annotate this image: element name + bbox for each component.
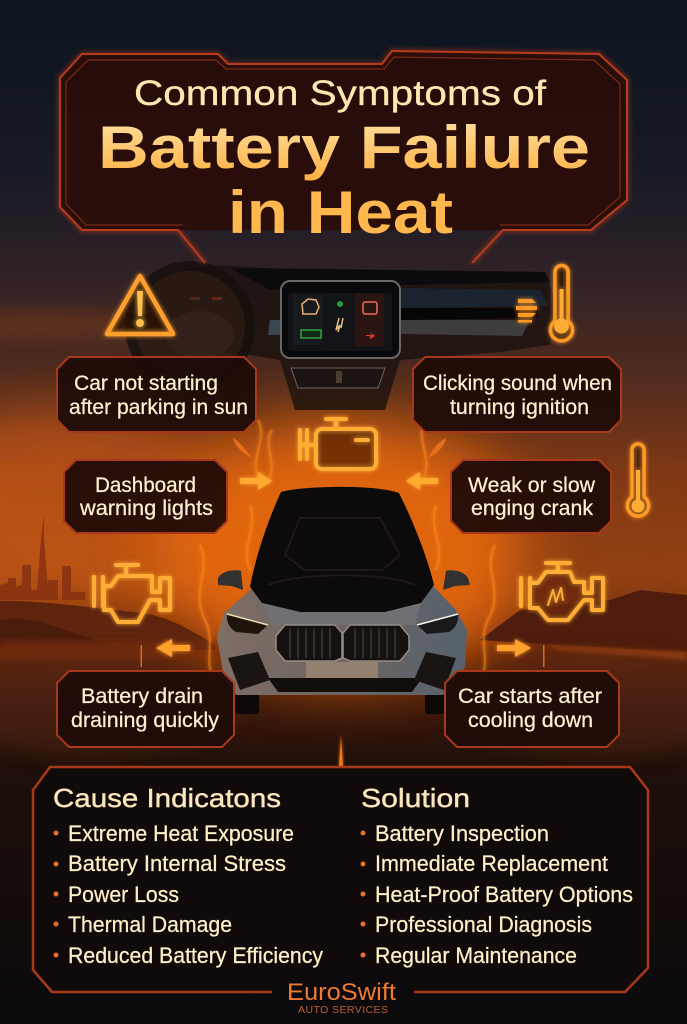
icon: heat vent glyph [516, 299, 537, 322]
arrow right lower [497, 639, 531, 657]
lower intake [268, 678, 422, 692]
label: battery drain: Battery drain [81, 685, 203, 708]
label: car not starting: after parking in sun [69, 396, 248, 419]
list: solutions: Immediate Replacement [375, 851, 608, 876]
list: causes: Reduced Battery Efficiency [68, 943, 323, 968]
centre console [291, 368, 385, 388]
hood inner ribs [268, 518, 415, 585]
title line 2: Battery Failure [98, 114, 590, 181]
label: clicking sound [413, 357, 621, 432]
label: dashboard warning lights: warning lights [79, 497, 213, 520]
icon: thermometer top right [550, 266, 572, 341]
license plate [306, 662, 378, 678]
list: solutions: Professional Diagnosis [375, 912, 592, 937]
list: causes: Power Loss [68, 882, 179, 907]
logo: EuroSwift Auto Services: AUTO SERVICES [298, 1004, 388, 1016]
list: causes: Battery Internal Stress [68, 851, 286, 876]
logo: EuroSwift Auto Services [272, 978, 414, 1024]
title panel [60, 51, 627, 263]
icon: engine right with spark [521, 563, 603, 620]
heading: cause indications: Cause Indicatons [53, 783, 281, 813]
nose panel [262, 603, 421, 625]
icon: engine left [94, 565, 170, 622]
logo: EuroSwift Auto Services: EuroSwift [287, 979, 396, 1006]
mirrors [218, 570, 470, 590]
tick mark left [140, 645, 142, 667]
headlights [227, 614, 268, 634]
list: solutions: Heat-Proof Battery Options [375, 882, 633, 907]
air vent band [268, 288, 548, 336]
label: battery drain: draining quickly [71, 709, 220, 732]
label: car not starting: Car not starting [74, 372, 218, 395]
tick mark right [543, 645, 544, 667]
wheels [235, 688, 449, 714]
label: battery drain [57, 671, 234, 747]
icon: thermometer right [628, 444, 648, 516]
list: solutions [360, 821, 633, 968]
open hood [250, 487, 434, 612]
list: solutions: Regular Maintenance [375, 943, 577, 968]
car body [217, 587, 467, 695]
icon: warning triangle [107, 276, 173, 334]
icon: battery [300, 419, 376, 469]
flame accent left [233, 438, 252, 458]
steering wheel [130, 266, 250, 386]
panel: causes and solutions [33, 767, 648, 992]
label: clicking sound: Clicking sound when [423, 372, 612, 395]
heading: solution: Solution [361, 783, 470, 813]
flame accent right [428, 438, 446, 458]
dashboard interior [130, 266, 555, 410]
car with open hood [217, 487, 470, 714]
city skyline [0, 515, 85, 600]
list: causes: Extreme Heat Exposure [68, 821, 294, 846]
infotainment screen [281, 281, 400, 358]
label: dashboard warning lights [64, 460, 227, 533]
label: car starts after cooling: Car starts after [458, 685, 602, 708]
label: clicking sound: turning ignition [450, 396, 589, 419]
label: car starts after cooling [445, 671, 619, 747]
list: causes: Thermal Damage [68, 912, 232, 937]
label: car starts after cooling: cooling down [468, 709, 593, 732]
road with centre line [0, 655, 687, 767]
label: weak or slow crank [451, 460, 611, 533]
arrow right to car [240, 472, 272, 490]
label: dashboard warning lights: Dashboard [95, 474, 196, 497]
kidney grille [276, 625, 409, 661]
title line 3: in Heat [228, 179, 453, 246]
label: weak or slow crank: enging crank [471, 497, 594, 520]
title line 1: Common Symptoms of [134, 74, 546, 113]
desert hills [0, 590, 687, 660]
list: solutions: Battery Inspection [375, 821, 549, 846]
arrow left lower [156, 639, 190, 657]
label: weak or slow crank: Weak or slow [468, 474, 596, 497]
arrow left to car [406, 472, 438, 490]
label: car not starting [57, 357, 256, 432]
list: causes [54, 821, 323, 968]
heat flames around car [200, 420, 495, 675]
